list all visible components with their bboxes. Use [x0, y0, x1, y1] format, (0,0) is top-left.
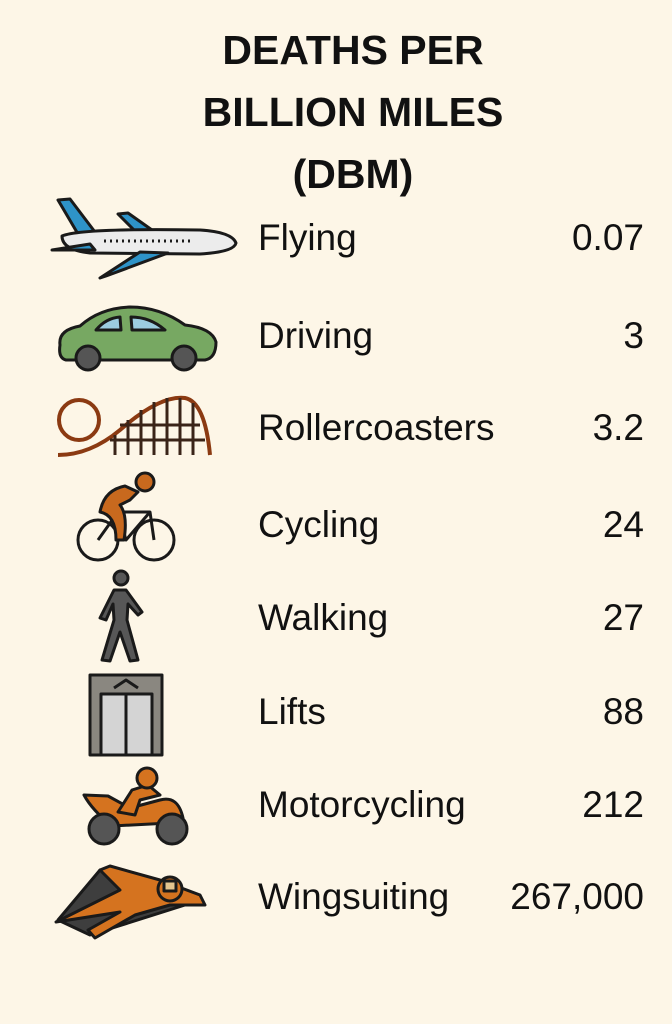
row: motorcycling: Motorcycling	[258, 784, 466, 825]
row: wingsuiting: 267,000	[510, 876, 644, 917]
icon: wingsuit	[56, 866, 205, 938]
row: rollercoasters: 3.2	[593, 407, 644, 448]
title: DEATHS PER	[222, 27, 484, 73]
row: driving: 3	[623, 315, 644, 356]
row: rollercoasters	[258, 407, 644, 448]
title	[203, 27, 503, 197]
row: rollercoasters: Rollercoasters	[258, 407, 494, 448]
row: wingsuiting	[258, 876, 644, 917]
row: walking: Walking	[258, 597, 388, 638]
row: wingsuiting: Wingsuiting	[258, 876, 449, 917]
icon: airplane	[52, 199, 236, 278]
row: driving: Driving	[258, 315, 373, 356]
title: (DBM)	[293, 151, 413, 197]
row: flying: 0.07	[572, 217, 644, 258]
icon: car	[60, 307, 216, 370]
icon: cyclist	[78, 473, 174, 560]
row: motorcycling	[258, 784, 644, 825]
title: BILLION MILES	[203, 89, 503, 135]
icon: lift	[90, 675, 162, 755]
icon: motorcyclist	[84, 768, 187, 844]
row: flying: Flying	[258, 217, 357, 258]
row: cycling: 24	[603, 504, 644, 545]
icon: walker	[100, 571, 142, 661]
row: lifts: 88	[603, 691, 644, 732]
icon: rollercoaster	[58, 398, 210, 455]
row: walking	[258, 597, 644, 638]
row: lifts	[258, 691, 644, 732]
row: cycling: Cycling	[258, 504, 379, 545]
row: walking: 27	[603, 597, 644, 638]
row: flying	[258, 217, 644, 258]
row: cycling	[258, 504, 644, 545]
row: lifts: Lifts	[258, 691, 326, 732]
row: motorcycling: 212	[582, 784, 644, 825]
row: driving	[258, 315, 644, 356]
